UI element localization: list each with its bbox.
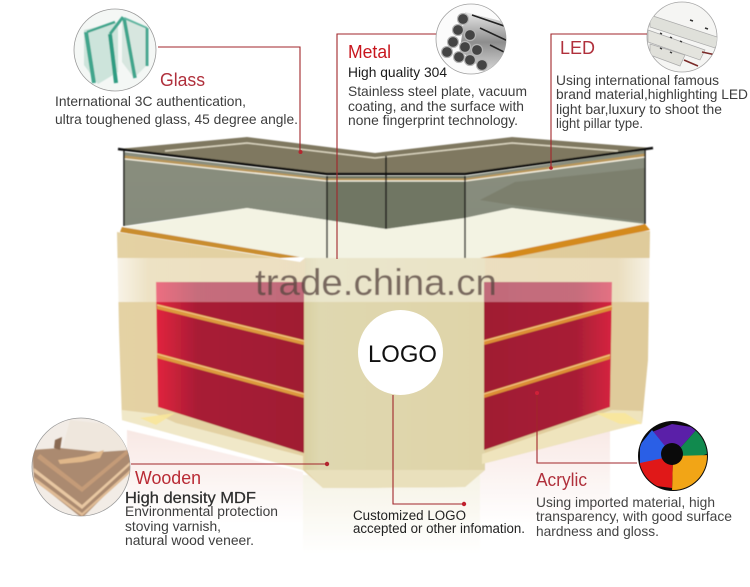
red acrylic panel right — [484, 282, 612, 450]
logo badge — [358, 310, 443, 395]
text: wooden subheading: High density MDF — [125, 490, 256, 507]
logo badge: LOGO — [368, 341, 437, 368]
gold top trim — [120, 227, 300, 258]
text: metal description — [348, 83, 527, 128]
heading: wooden: Wooden — [135, 468, 201, 488]
text: glass description — [55, 93, 298, 127]
display counter illustration — [117, 137, 653, 555]
text: wooden description — [125, 503, 278, 548]
icon: MDF boards — [32, 418, 131, 518]
text: LED description: light bar,luxury to shoot the — [556, 101, 722, 117]
heading: glass: Glass — [160, 70, 205, 90]
text: wooden description: natural wood veneer. — [125, 532, 254, 548]
text: acrylic description: Using imported material, high — [536, 494, 715, 510]
red acrylic panel left — [156, 282, 304, 453]
text: LED description — [556, 72, 748, 131]
icon: metal tubes — [436, 4, 510, 74]
connector: metal — [337, 34, 436, 259]
connector: wooden — [131, 462, 329, 466]
icon: glass sample — [74, 9, 156, 91]
black frame — [118, 148, 653, 174]
watermark text: trade.china.cn — [255, 262, 497, 303]
text: LED description: brand material,highlighting LED — [556, 86, 748, 102]
heading: acrylic: Acrylic — [536, 470, 587, 490]
text: acrylic description: transparency, with good surface — [536, 508, 732, 524]
text: logo caption: accepted or other infomation. — [353, 521, 525, 536]
connector: glass — [158, 47, 302, 154]
text: LED description: light pillar type. — [556, 115, 643, 131]
floor reflection — [127, 425, 610, 555]
glass display case — [118, 137, 653, 259]
icon: LED strips — [647, 2, 720, 72]
heading: metal: Metal — [348, 42, 391, 62]
text: wooden description: stoving varnish, — [125, 518, 221, 534]
watermark band — [117, 258, 650, 303]
glass top surface — [118, 137, 653, 175]
icon: acrylic colour wheel — [638, 421, 712, 492]
text: glass description: ultra toughened glass, 45 degree angle. — [55, 111, 298, 127]
LED trim under top — [125, 155, 645, 180]
text: logo caption — [353, 508, 525, 536]
text: metal description: coating, and the surface with — [348, 98, 524, 114]
text: metal subheading: High quality 304 — [348, 64, 447, 80]
text: LED description: Using international famous — [556, 72, 719, 88]
text: acrylic description — [536, 494, 732, 539]
text: metal description: Stainless steel plate, vacuum — [348, 83, 527, 99]
connector: acrylic — [535, 391, 637, 463]
text: acrylic description: hardness and gloss. — [536, 523, 659, 539]
heading: LED: LED — [560, 38, 595, 58]
text: metal description: none fingerprint technology. — [348, 112, 518, 128]
connector: LED — [549, 34, 647, 170]
text: logo caption: Customized LOGO — [353, 508, 466, 523]
wooden cabinet — [117, 224, 650, 488]
connector: logo — [393, 395, 466, 506]
text: wooden description: Environmental protection — [125, 503, 278, 519]
text: glass description: International 3C authentication, — [55, 93, 246, 109]
